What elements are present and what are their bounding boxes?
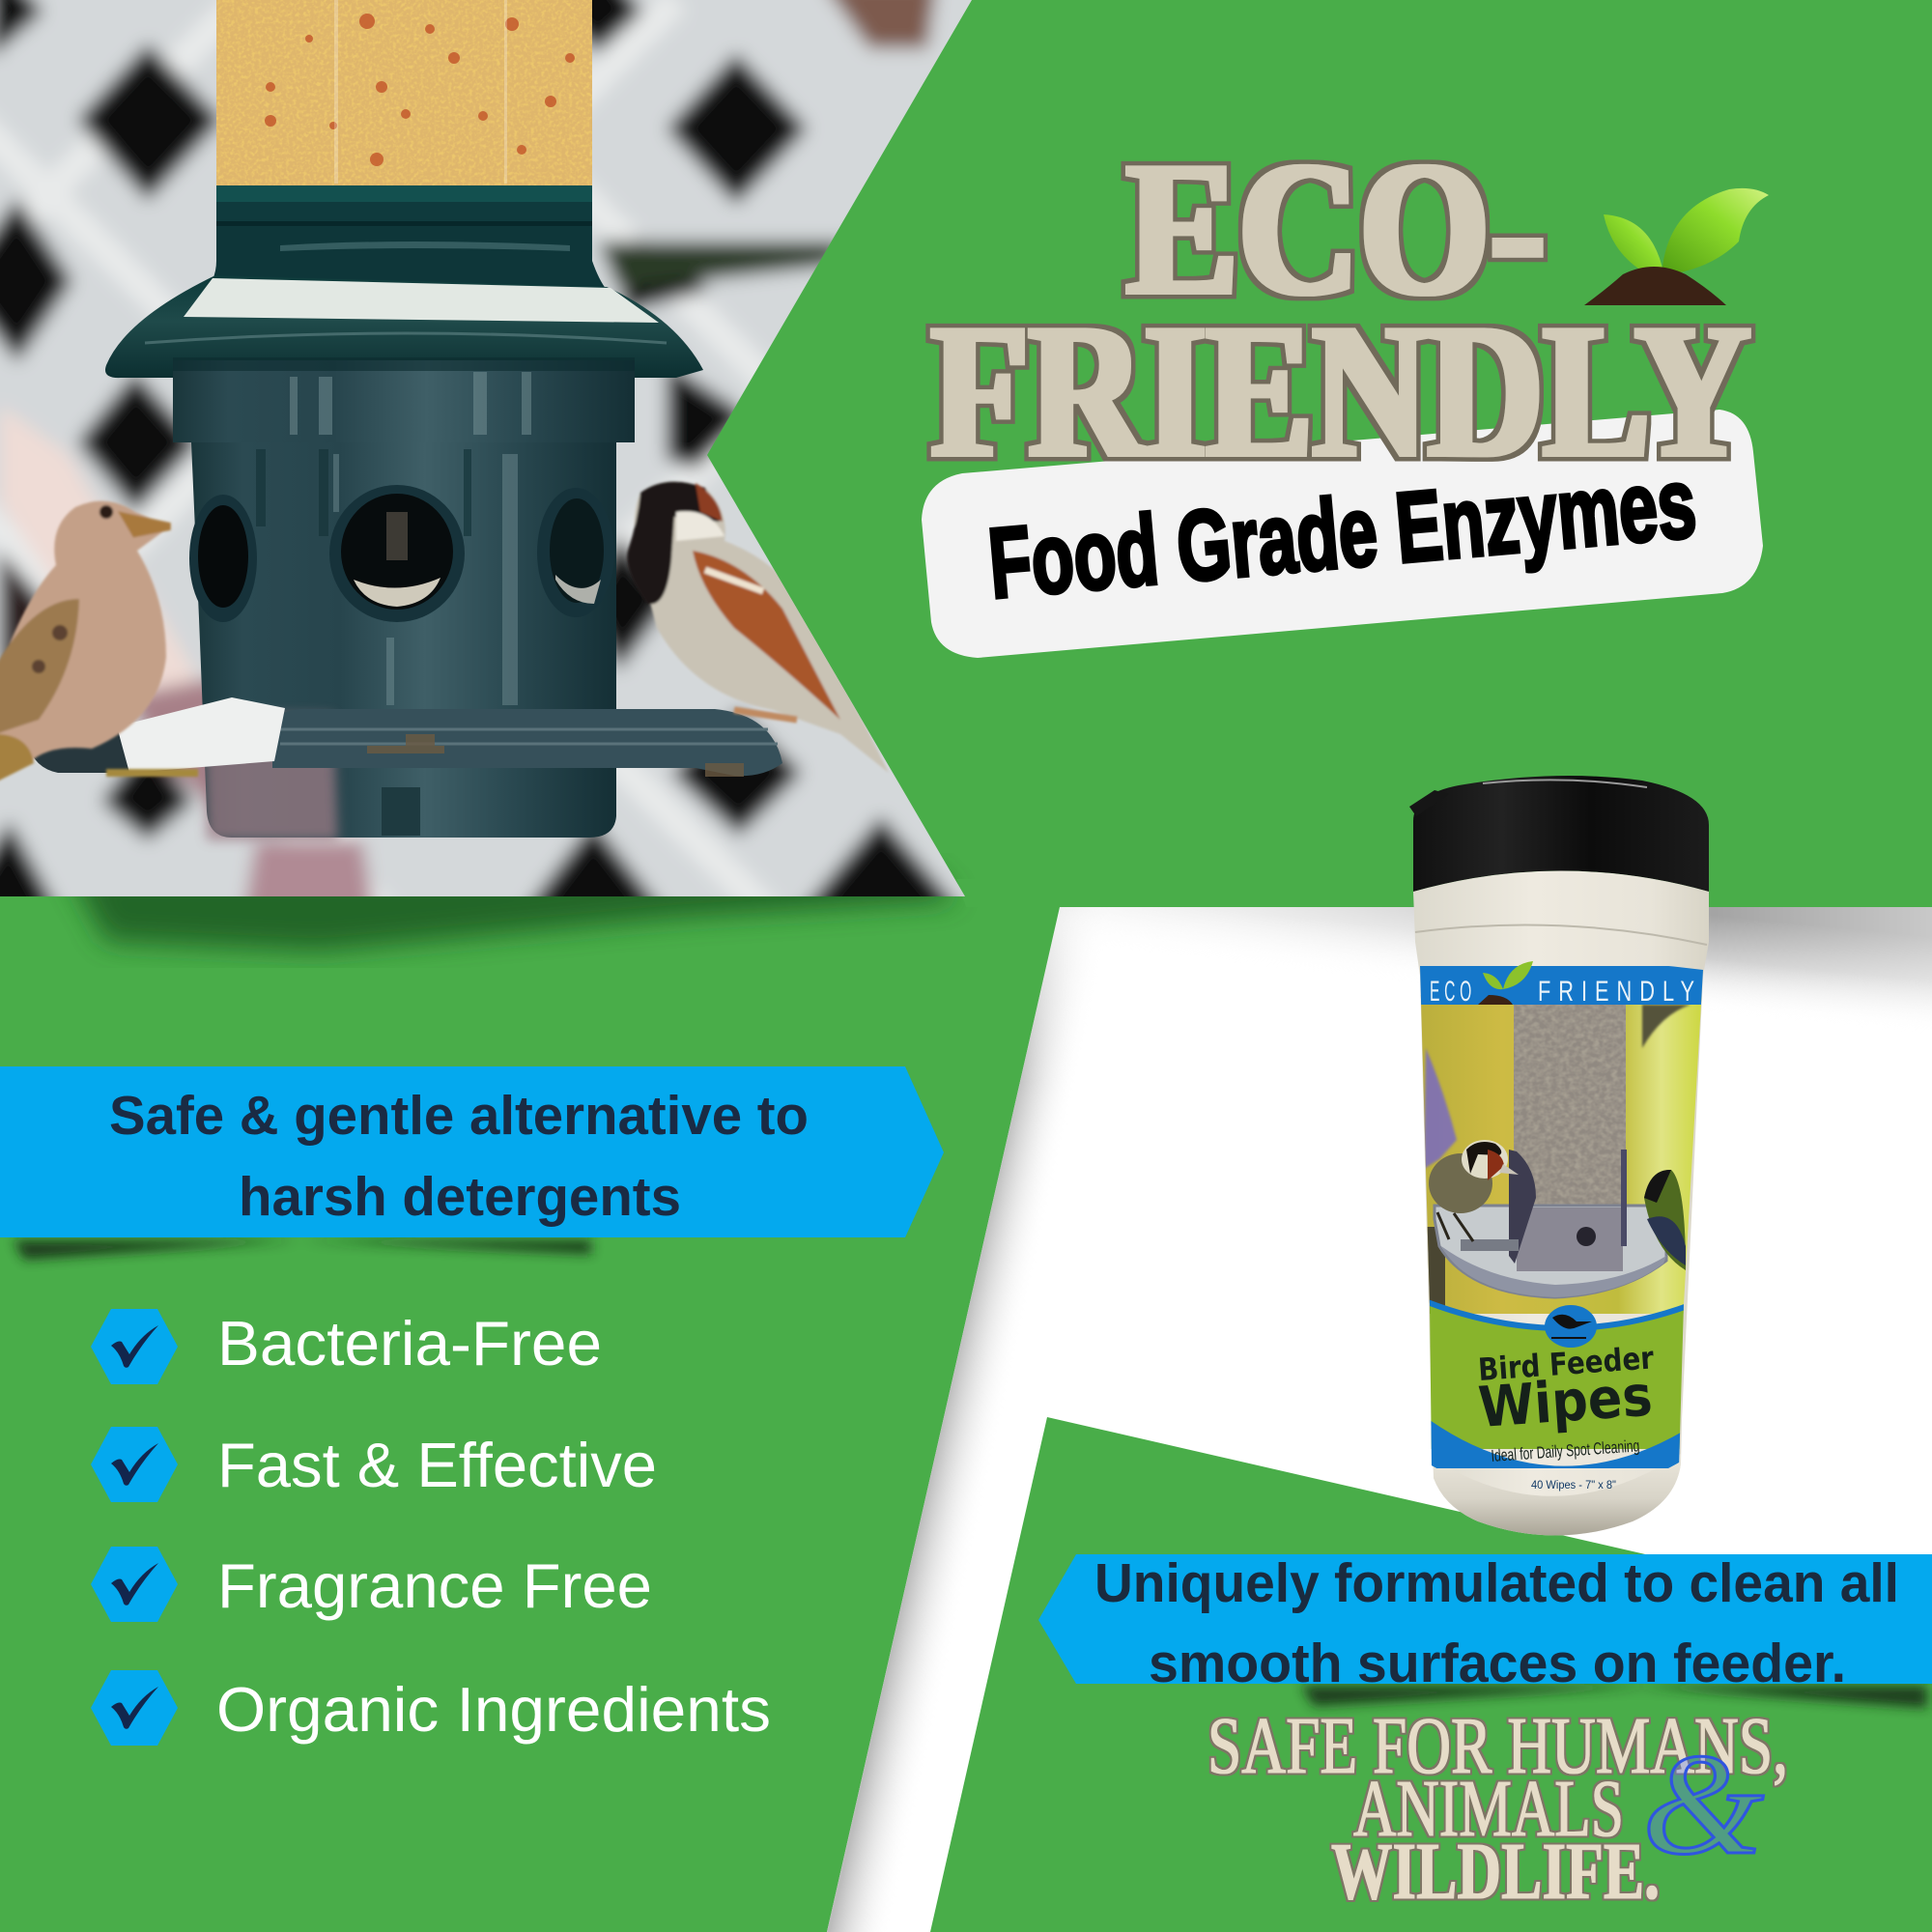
label text bbox=[1476, 1339, 1655, 1492]
ampersand: & bbox=[1642, 1724, 1764, 1885]
top right green panel patch bbox=[956, 879, 1932, 907]
item: Fast & Effective: Fast & Effective bbox=[217, 1430, 657, 1500]
port holes bbox=[329, 485, 465, 622]
item: Bacteria-Free bbox=[91, 1308, 602, 1384]
white band bbox=[184, 278, 659, 323]
base shade bbox=[1434, 1454, 1681, 1536]
band lettering: FRIENDLY bbox=[1538, 976, 1702, 1008]
slogan: safe for humans, animals and wildlife bbox=[1208, 1701, 1788, 1917]
lid bbox=[1409, 776, 1709, 892]
tray bbox=[272, 709, 782, 776]
label artwork bbox=[1415, 966, 1710, 1499]
product: bird feeder wipes canister bbox=[1409, 776, 1710, 1536]
lattice background bbox=[0, 0, 972, 896]
title: ECO-FRIENDLY: ECO- bbox=[1126, 123, 1546, 334]
seed tube bbox=[216, 0, 592, 191]
collar bbox=[214, 226, 605, 287]
label sprout bbox=[1478, 961, 1533, 1005]
slogan lines: ANIMALS bbox=[1353, 1764, 1624, 1854]
feeder plate bbox=[1435, 1206, 1666, 1297]
collar seam bbox=[1415, 924, 1707, 945]
slogan lines bbox=[1208, 1701, 1788, 1917]
title: ECO-FRIENDLY bbox=[931, 123, 1750, 497]
photo: sparrows on a bird feeder bbox=[0, 0, 972, 896]
body bbox=[1413, 871, 1709, 1536]
feeder tube bbox=[1514, 1005, 1626, 1212]
title: ECO-FRIENDLY: FRIENDLY bbox=[931, 285, 1750, 497]
right sparrow bbox=[627, 482, 889, 773]
label text: Ideal for Daily Spot Cleaning bbox=[1491, 1435, 1640, 1465]
blue bands bbox=[1415, 966, 1710, 1005]
callout banner: uniquely formulated: smooth surfaces on feeder. bbox=[1149, 1633, 1846, 1694]
item: Bacteria-Free: Bacteria-Free bbox=[217, 1308, 602, 1378]
lower body bbox=[191, 442, 616, 838]
slogan lines: WILDLIFE. bbox=[1331, 1827, 1660, 1917]
tape bbox=[117, 697, 285, 773]
callout banner: uniquely formulated bbox=[1038, 1552, 1932, 1708]
callout banner: safe and gentle: Safe & gentle alternative to bbox=[109, 1085, 809, 1147]
panel: lower right green wedge bbox=[930, 1417, 1932, 1932]
top-left panel shadow bbox=[68, 869, 956, 952]
upper cylinder bbox=[173, 360, 635, 442]
callout banner: safe and gentle: harsh detergents bbox=[239, 1166, 681, 1228]
icon: sprout in soil bbox=[1584, 188, 1769, 305]
panel: white lower right area bbox=[827, 907, 1932, 1932]
label text: Bird Feeder bbox=[1477, 1339, 1655, 1388]
goldfinch bbox=[1429, 1153, 1492, 1213]
band lettering bbox=[1430, 976, 1702, 1008]
feeder bbox=[28, 0, 782, 840]
band lettering: ECO bbox=[1430, 976, 1476, 1008]
callout banner: uniquely formulated: Uniquely formulated to clean all bbox=[1094, 1552, 1899, 1614]
white tilted label shape bbox=[922, 410, 1763, 658]
left sparrow bbox=[0, 501, 198, 782]
label text: Wipes bbox=[1476, 1363, 1655, 1440]
checklist bbox=[91, 1308, 771, 1746]
callout banner: safe and gentle bbox=[0, 1066, 944, 1260]
rim dome bbox=[105, 275, 703, 378]
green field bbox=[1415, 1299, 1710, 1449]
tit bbox=[1644, 1170, 1686, 1270]
label text: 40 Wipes - 7" x 8" bbox=[1531, 1480, 1616, 1492]
mauve blur over lower body bbox=[203, 715, 338, 840]
item: Organic Ingredients: Organic Ingredients bbox=[216, 1674, 771, 1745]
item: Fragrance Free: Fragrance Free bbox=[217, 1550, 652, 1621]
